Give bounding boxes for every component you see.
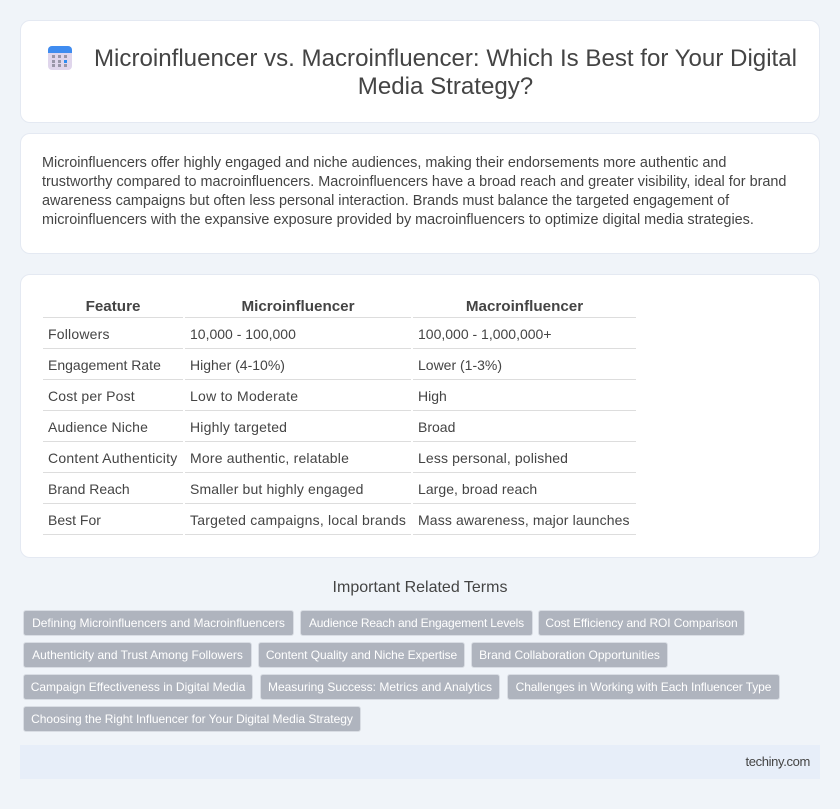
comparison table: Mass awareness, major launches [418, 512, 630, 528]
comparison table: Smaller but highly engaged [190, 481, 364, 497]
comparison table: Audience Niche [48, 419, 148, 435]
related term tags: Authenticity and Trust Among Followers [32, 648, 243, 662]
comparison table: Large, broad reach [418, 481, 537, 497]
comparison table: Macroinfluencer [466, 298, 583, 315]
footer source: techiny.com [745, 754, 810, 769]
comparison table: Low to Moderate [190, 388, 298, 404]
intro text [42, 155, 786, 228]
intro text: trustworthy compared to macroinfluencers. Macroinfluencers have a broad reach and greater visibility, ideal for brand [42, 174, 786, 190]
intro text: awareness campaigns but often less personal interaction. Brands must balance the targeted engagement of [42, 193, 729, 209]
comparison table: Lower (1-3%) [418, 357, 502, 373]
comparison table: High [418, 388, 447, 404]
footer bar [20, 745, 820, 779]
comparison table: Feature [86, 298, 140, 315]
related term tags: Content Quality and Niche Expertise [266, 648, 457, 662]
panel: comparison table [20, 274, 820, 558]
panel: intro paragraph [20, 133, 820, 254]
title: Media Strategy? [358, 73, 533, 100]
comparison table: Engagement Rate [48, 357, 161, 373]
title: Microinfluencer vs. Macroinfluencer: Which Is Best for Your Digital [94, 45, 797, 72]
comparison table: Content Authenticity [48, 450, 178, 466]
related term tags: Defining Microinfluencers and Macroinfluencers [32, 616, 285, 630]
title [94, 45, 797, 100]
comparison table: Microinfluencer [241, 298, 355, 315]
comparison table: Followers [48, 326, 110, 342]
related term tags: Cost Efficiency and ROI Comparison [545, 616, 738, 630]
related term tags: Campaign Effectiveness in Digital Media [31, 680, 245, 694]
panel: title card [20, 20, 820, 123]
comparison table: Brand Reach [48, 481, 130, 497]
comparison table: Best For [48, 512, 101, 528]
related term tags [23, 610, 780, 732]
comparison table: Broad [418, 419, 455, 435]
related term tags: Choosing the Right Influencer for Your Digital Media Strategy [31, 712, 353, 726]
related term tags: Brand Collaboration Opportunities [479, 648, 660, 662]
intro text: Microinfluencers offer highly engaged and niche audiences, making their endorsements more authentic and [42, 155, 726, 171]
comparison table: Higher (4-10%) [190, 357, 285, 373]
related terms heading: Important Related Terms [333, 579, 507, 596]
related term tags: Challenges in Working with Each Influencer Type [516, 680, 771, 694]
related term tags: Measuring Success: Metrics and Analytics [268, 680, 492, 694]
icon: calendar [48, 46, 72, 70]
intro text: microinfluencers with the expansive exposure provided by macroinfluencers to optimize digital media strategies. [42, 212, 754, 228]
comparison table [43, 298, 636, 535]
related term tags: Audience Reach and Engagement Levels [309, 616, 524, 630]
comparison table: More authentic, relatable [190, 450, 349, 466]
comparison table: 100,000 - 1,000,000+ [418, 326, 552, 342]
comparison table: 10,000 - 100,000 [190, 326, 296, 342]
comparison table: Highly targeted [190, 419, 287, 435]
comparison table: Cost per Post [48, 388, 135, 404]
comparison table: Less personal, polished [418, 450, 568, 466]
comparison table: Targeted campaigns, local brands [190, 512, 406, 528]
